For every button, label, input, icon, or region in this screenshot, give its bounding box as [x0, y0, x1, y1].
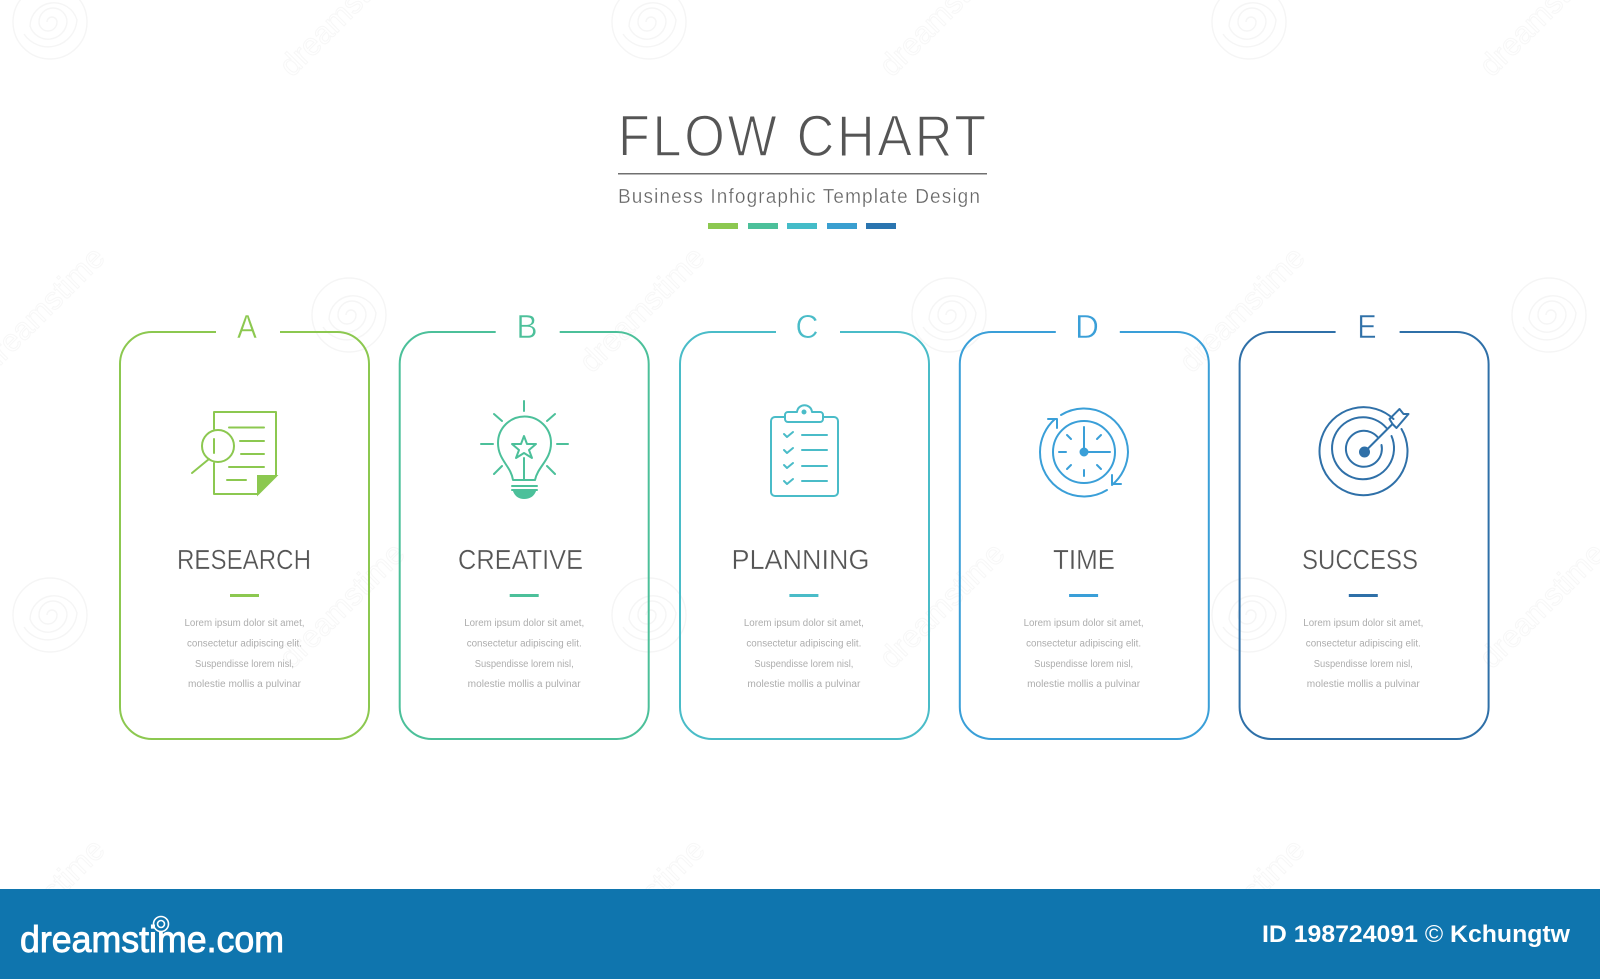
accent bar [1349, 594, 1378, 597]
body text: Lorem ipsum dolor sit amet, [184, 618, 304, 629]
panel: C planning [680, 308, 929, 739]
heading: RESEARCH [177, 544, 311, 575]
panel: B creative [400, 308, 649, 739]
heading: CREATIVE [458, 544, 583, 575]
image credit: ID 198724091 © Kchungtw [1262, 921, 1570, 948]
body text [744, 618, 864, 690]
panel: E success [1240, 308, 1489, 739]
body text: molestie mollis a pulvinar [747, 679, 861, 690]
accent bar [230, 594, 259, 597]
heading: SUCCESS [1302, 544, 1418, 575]
card outline [400, 332, 649, 739]
letter C: C [796, 308, 818, 345]
panel: D time [960, 308, 1209, 739]
body text [184, 618, 304, 690]
letter E: E [1358, 308, 1376, 345]
body text: molestie mollis a pulvinar [468, 679, 581, 690]
body text: Lorem ipsum dolor sit amet, [464, 618, 584, 629]
infographic: dreamstime [572, 240, 711, 379]
body text: Lorem ipsum dolor sit amet, [1024, 618, 1144, 629]
body text [1303, 618, 1423, 690]
body text [1024, 618, 1144, 690]
letter D: D [1075, 308, 1099, 345]
card outline [680, 332, 929, 739]
body text: consectetur adipiscing elit. [1026, 638, 1141, 650]
icon: logo spiral [154, 916, 168, 932]
body text: Suspendisse lorem nisl, [1034, 659, 1133, 670]
infographic: dreamstime [272, 536, 411, 675]
panel: A research [120, 308, 369, 739]
body text: consectetur adipiscing elit. [187, 638, 302, 650]
body text: Lorem ipsum dolor sit amet, [744, 618, 864, 629]
title block [618, 103, 987, 229]
colour dashes [708, 223, 896, 229]
icon: clipboard checklist [771, 405, 838, 496]
subtitle: Business Infographic Template Design [618, 186, 980, 208]
title: FLOW CHART [618, 103, 986, 169]
body text: Suspendisse lorem nisl, [475, 659, 574, 670]
body text: Suspendisse lorem nisl, [754, 659, 853, 670]
card outline [960, 332, 1209, 739]
body text: consectetur adipiscing elit. [467, 638, 582, 650]
body text: Lorem ipsum dolor sit amet, [1303, 618, 1423, 629]
logo wordmark: dreamstime.com [20, 919, 284, 960]
heading: PLANNING [732, 544, 870, 575]
icon: clock with cycle arrows [1040, 409, 1128, 496]
title underline [618, 173, 987, 174]
card outline [120, 332, 369, 739]
letter B: B [516, 308, 538, 345]
accent bar [510, 594, 539, 597]
letter A: A [237, 308, 257, 345]
body text: Suspendisse lorem nisl, [195, 659, 294, 670]
body text [464, 618, 584, 690]
banner background [0, 889, 1600, 979]
body text: Suspendisse lorem nisl, [1314, 659, 1413, 670]
body text: consectetur adipiscing elit. [746, 638, 861, 650]
infographic: dreamstime [1172, 240, 1311, 379]
icon: light bulb with star [481, 401, 568, 498]
footer banner [0, 889, 1600, 979]
body text: consectetur adipiscing elit. [1306, 638, 1421, 650]
body text: molestie mollis a pulvinar [1307, 679, 1420, 690]
accent bar [789, 594, 818, 597]
card outline [1240, 332, 1489, 739]
accent bar [1069, 594, 1098, 597]
infographic: dreamstime [872, 536, 1011, 675]
icon: target with arrow [1320, 407, 1408, 495]
infographic: dreamstime [572, 832, 711, 971]
body text: molestie mollis a pulvinar [188, 679, 302, 690]
icon: document with magnifier [192, 412, 276, 494]
heading: TIME [1053, 544, 1115, 575]
infographic: dreamstime [1172, 832, 1311, 971]
body text: molestie mollis a pulvinar [1027, 679, 1141, 690]
